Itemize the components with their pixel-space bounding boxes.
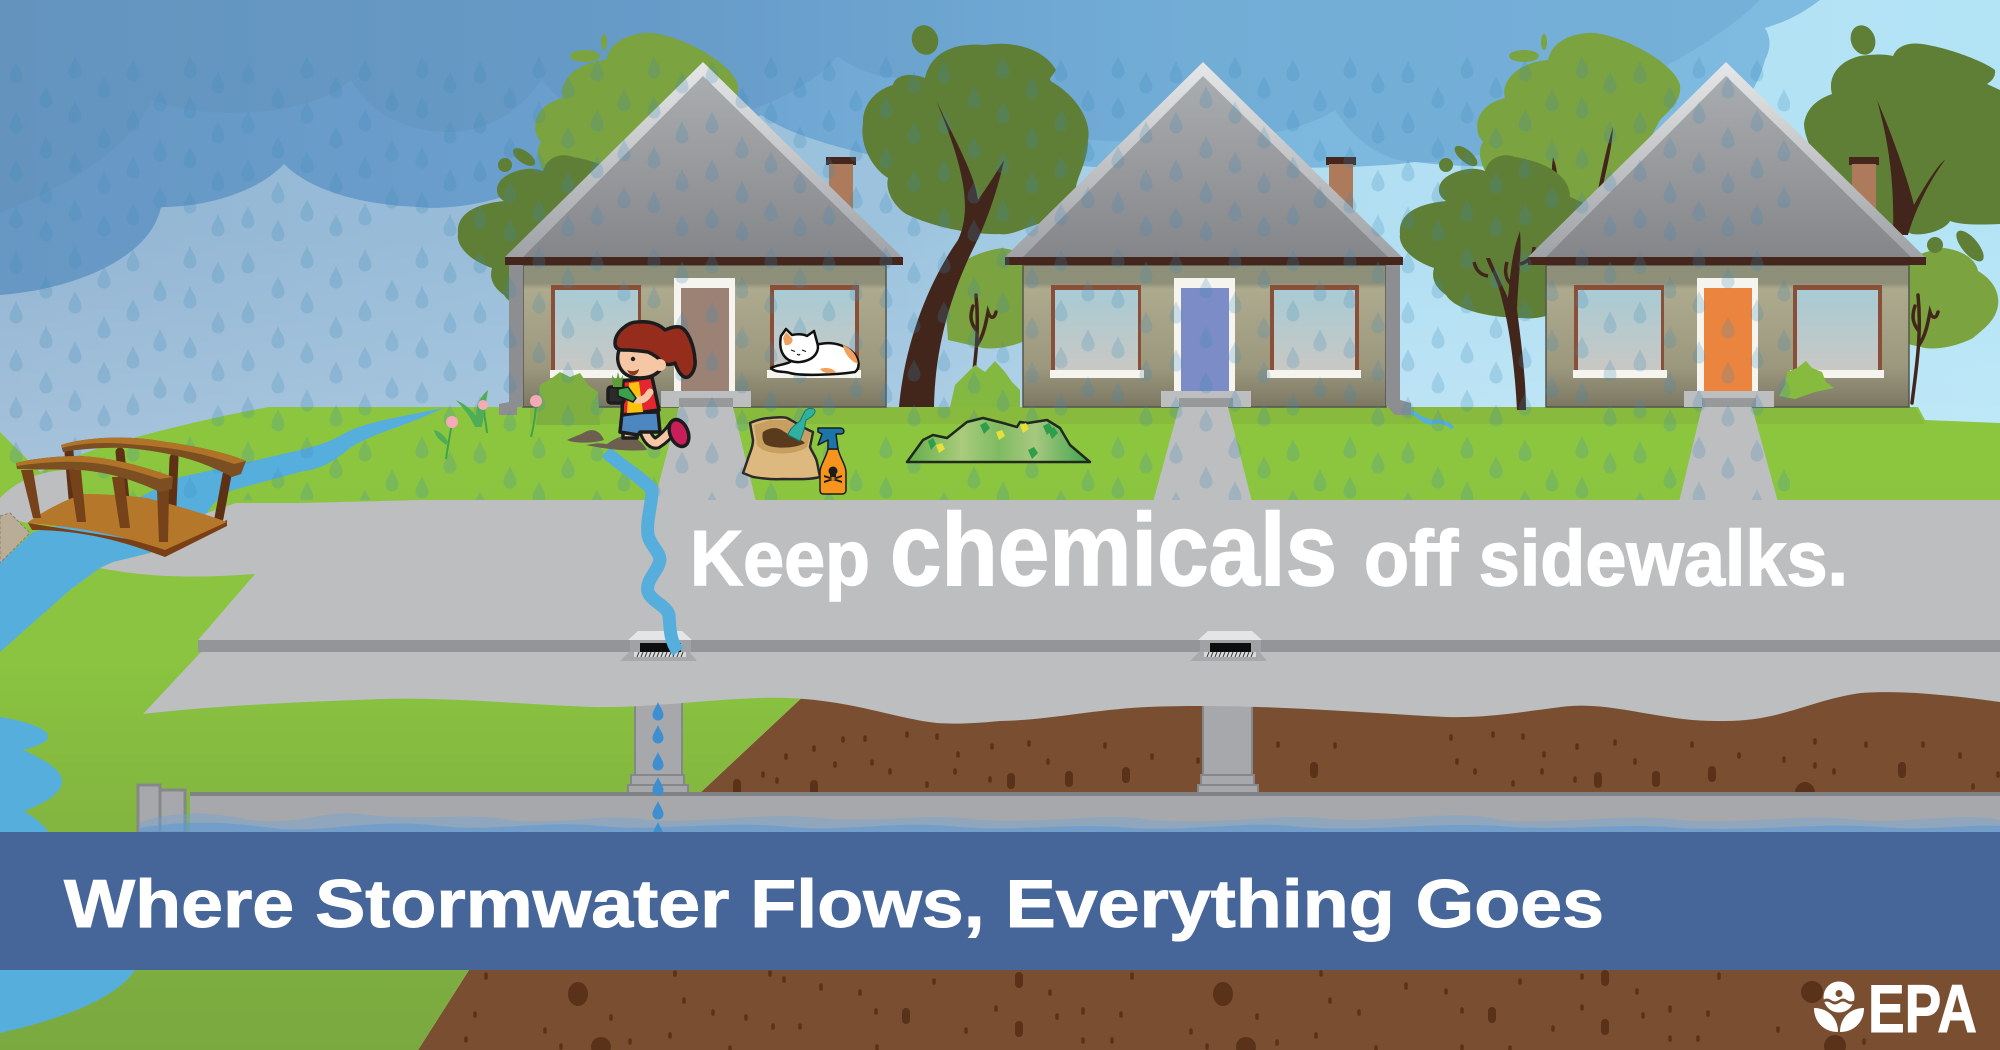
storm drain inlet 1 [620,631,697,661]
flowers and sprouts [434,390,542,459]
front leg [623,429,637,438]
curb [198,640,2000,652]
house 3 with orange door [1528,62,1926,407]
trees [458,21,2000,410]
hair [615,322,695,377]
front posts [21,470,169,542]
headline: keep chemicals off sidewalks [690,492,1848,607]
dirt mounds [567,430,647,451]
falling drops in pipe [652,702,664,841]
trowel [788,408,815,441]
back rail [61,438,246,477]
storm clouds [0,0,1820,295]
shirt [627,382,643,413]
plant pot [608,387,624,403]
cat body [771,343,859,375]
lawn [0,407,2000,1050]
flower mark [1814,982,1864,1032]
shorts [620,412,660,435]
headline: keep chemicals off sidewalks: Keep [690,514,870,602]
sack of soil with trowel [743,408,820,479]
storm drain inlet 2 [1190,631,1267,661]
plant [612,372,623,387]
stones by the river [0,513,30,563]
eye and mouth [631,357,635,361]
EPA logo [1814,971,1977,1047]
underground storm pipe [138,785,2000,833]
headline: keep chemicals off sidewalks: off sidewalks. [1364,514,1848,602]
street and sidewalk [0,470,2000,724]
river and pond [0,408,1453,1033]
underground soil [418,690,2000,1050]
back posts [69,452,227,518]
skull symbol [824,466,842,483]
polluted runoff stream [606,452,678,652]
arm [635,392,650,400]
downspout [499,265,523,415]
chemical spray bottle [818,428,846,494]
EPA wordmark: EPA [1868,971,1977,1047]
back leg outline [645,426,674,443]
banner title: Where Stormwater Flows, Everything Goes [64,866,1604,942]
rain drops [0,54,1790,500]
water in pipe [140,813,2000,833]
cat head [780,329,818,362]
face [618,345,664,378]
shrubs by the houses [536,361,1834,425]
headline: keep chemicals off sidewalks: chemicals [890,492,1337,607]
glove [618,387,636,402]
front walkways [654,407,1778,502]
leaves [928,422,1058,459]
jacket [622,377,659,415]
compost mound [907,418,1090,462]
child gardening [608,322,695,449]
cat patches [843,345,858,364]
deck side [28,520,227,557]
sky background [0,0,2000,560]
cat on window sill [771,329,859,375]
ear [654,359,666,371]
shoe [665,417,693,449]
vertical storm drain pipes [628,690,1258,793]
wooden footbridge [16,438,246,557]
house 1 with brown door [499,62,903,415]
house 2 with blue door [1005,62,1411,415]
deck top [27,494,227,550]
front rail [16,456,173,492]
downspout [1386,265,1411,415]
banner [0,832,2000,970]
